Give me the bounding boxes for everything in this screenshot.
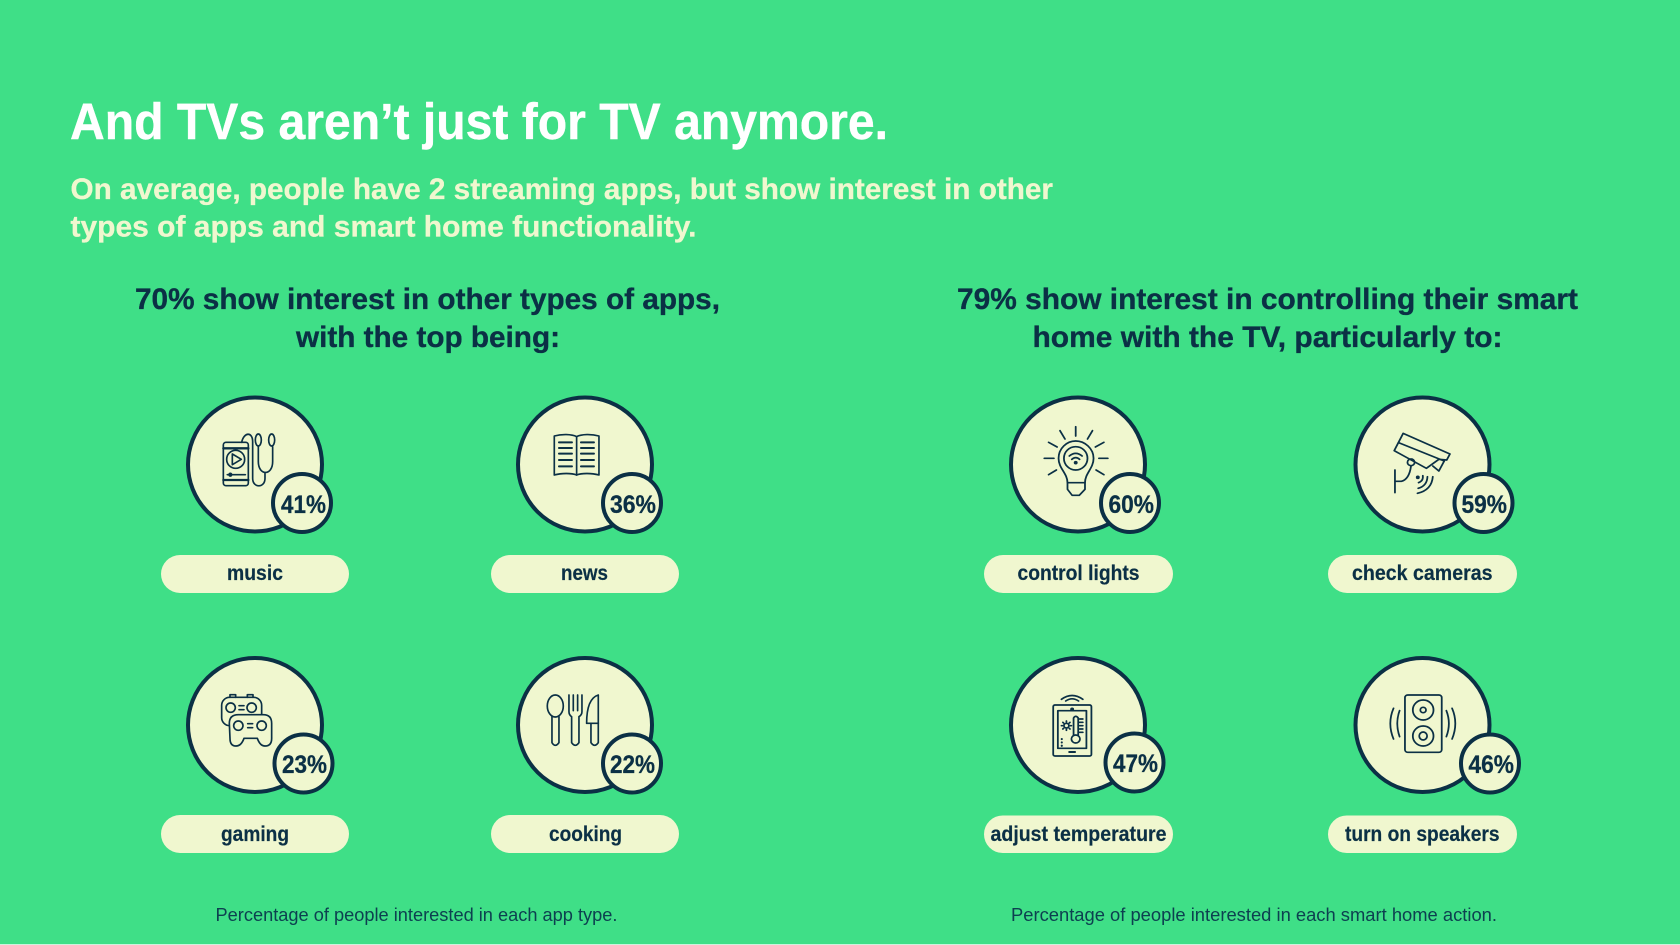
label: control lights	[984, 555, 1173, 593]
badge: 41%	[273, 474, 331, 532]
icon: phone with earphones	[223, 434, 275, 486]
label: music	[161, 555, 349, 593]
panel: smart home	[957, 283, 1578, 925]
badge: 22%	[603, 734, 661, 792]
item: check cameras	[1328, 398, 1517, 593]
subtitle: On average, people have 2 streaming apps, but show interest in other	[70, 173, 1053, 206]
heading: smart home: 79% show interest in controlling their smart	[957, 283, 1578, 316]
icon: game controllers	[222, 695, 272, 746]
badge: 46%: 46%	[1468, 751, 1514, 779]
caption: smart home: Percentage of people interested in each smart home action.	[1011, 905, 1497, 925]
icon: security camera	[1394, 433, 1450, 493]
label: news	[491, 555, 679, 593]
label: adjust temperature	[984, 816, 1173, 853]
subtitle: types of apps and smart home functionality.	[70, 210, 696, 244]
icon: wifi light bulb	[1044, 427, 1108, 495]
badge: 60%	[1101, 474, 1159, 532]
label: turn on speakers	[1328, 816, 1517, 853]
item: adjust temperature	[984, 658, 1173, 853]
badge: 59%: 59%	[1462, 491, 1507, 519]
label: gaming	[161, 815, 349, 853]
item: music	[161, 398, 349, 593]
item: gaming	[161, 658, 349, 853]
label: adjust temperature: adjust temperature	[990, 823, 1166, 846]
label: turn on speakers: turn on speakers	[1345, 823, 1500, 846]
badge: 36%	[603, 474, 661, 532]
badge: 41%: 41%	[281, 491, 326, 519]
icon: speaker	[1390, 695, 1455, 752]
icon: cutlery	[547, 695, 598, 745]
label: check cameras: check cameras	[1352, 562, 1492, 585]
badge: 47%: 47%	[1113, 750, 1158, 778]
label: check cameras	[1328, 555, 1517, 593]
label: news: news	[561, 562, 608, 585]
badge: 36%: 36%	[610, 491, 656, 519]
heading: smart home: home with the TV, particularly to:	[1032, 321, 1502, 354]
subtitle	[70, 173, 1053, 244]
caption: apps: Percentage of people interested in each app type.	[216, 905, 618, 925]
label: cooking	[491, 815, 679, 853]
heading: apps: with the top being:	[295, 321, 560, 354]
item: news	[491, 398, 679, 593]
badge: 23%	[274, 734, 332, 792]
icon: open book	[554, 435, 599, 475]
label: gaming: gaming	[221, 823, 289, 846]
icon: smart thermostat	[1053, 695, 1091, 756]
label: control lights: control lights	[1018, 562, 1140, 585]
badge: 59%	[1454, 474, 1512, 532]
panel: apps	[135, 283, 720, 925]
title: And TVs aren’t just for TV anymore.	[70, 93, 888, 150]
label: music: music	[227, 562, 283, 585]
badge: 47%	[1106, 734, 1164, 792]
badge: 23%: 23%	[282, 751, 327, 779]
label: cooking: cooking	[549, 823, 622, 846]
item: cooking	[491, 658, 679, 853]
badge: 60%: 60%	[1108, 491, 1154, 519]
badge: 46%	[1461, 734, 1519, 792]
heading: apps	[135, 283, 720, 354]
item: control lights	[984, 398, 1173, 593]
item: turn on speakers	[1328, 658, 1519, 853]
heading: smart home	[957, 283, 1578, 354]
heading: apps: 70% show interest in other types of apps,	[135, 283, 720, 316]
badge: 22%: 22%	[610, 751, 655, 779]
